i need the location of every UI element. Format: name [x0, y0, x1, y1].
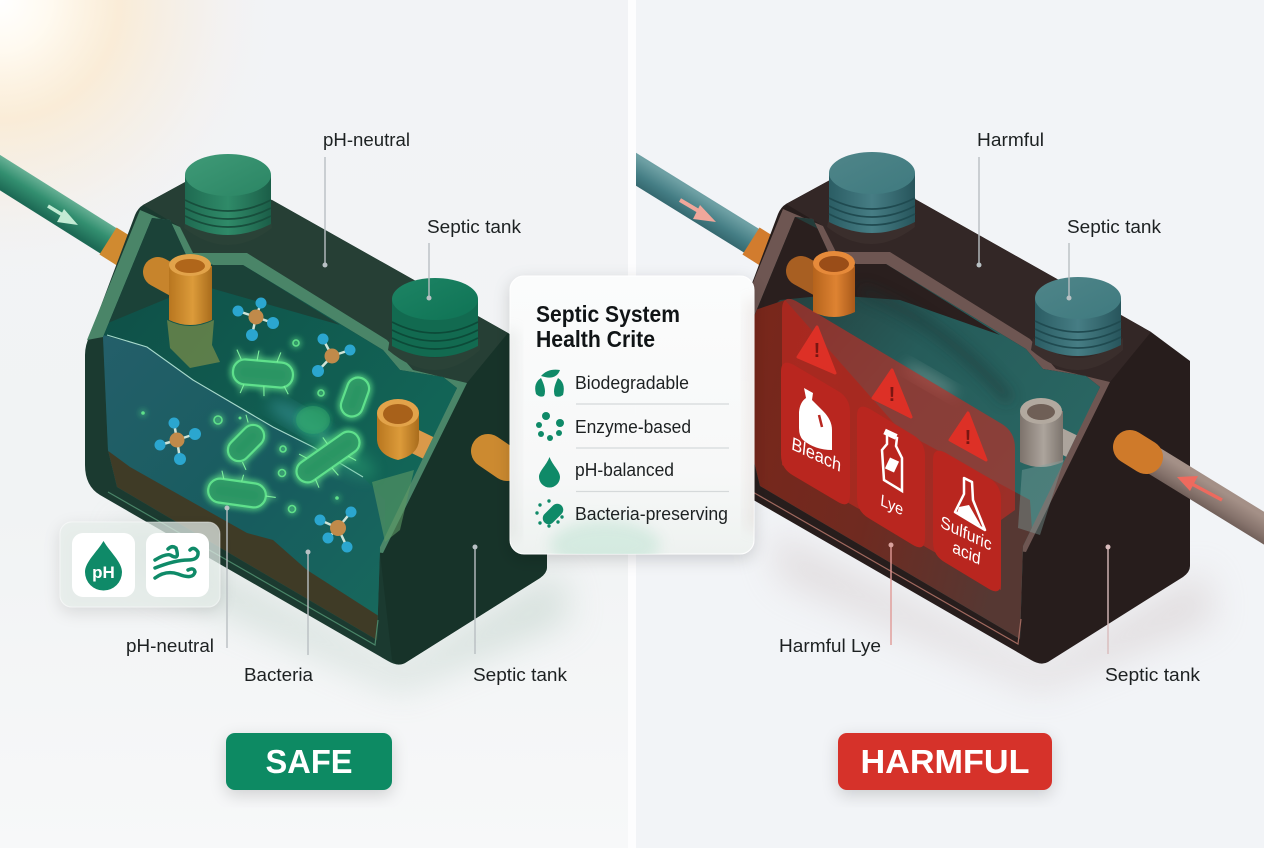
cap front collar: [388, 338, 480, 370]
outlet pipe right tank: [1130, 447, 1264, 538]
badge: SAFE: [226, 733, 392, 790]
top face: [143, 181, 508, 383]
card: Bleach: Bleach: [791, 433, 842, 476]
outlet elbow: [412, 440, 445, 456]
inlet pipe right tank: [636, 152, 770, 265]
inlet pipe left: [0, 160, 135, 258]
label: pH-neutral bottom: [126, 506, 230, 656]
rough foam: [874, 298, 1012, 402]
label: Septic tank body: [472, 544, 568, 685]
item: Biodegradable: Biodegradable: [575, 373, 689, 393]
panel heading: Health Crite: [536, 326, 655, 352]
outlet pipe riser: [1018, 398, 1064, 535]
badge: HARMFUL: HARMFUL: [860, 743, 1030, 780]
label: Harmful Lye: Harmful Lye: [779, 636, 881, 656]
label: Septic tank lid: Septic tank: [427, 217, 522, 237]
light patch: [266, 396, 332, 442]
cap front collar: [1031, 338, 1123, 370]
front water: [103, 335, 384, 616]
lid: back: [829, 152, 915, 233]
panel heading: Septic System: [536, 301, 680, 327]
cap rear collar: [184, 218, 272, 245]
card: Sulfuric acid: [933, 451, 1001, 591]
icon: bacterium: [535, 499, 566, 528]
label: Harmful: Harmful: [977, 130, 1044, 150]
dry interior: [103, 218, 340, 325]
card: pH drop: pH: [92, 563, 115, 582]
label: pH-neutral top: [322, 130, 410, 268]
translucent red sheet: [782, 299, 1015, 590]
septic tank: harmful: [728, 152, 1190, 664]
item: Enzyme-based: [536, 412, 691, 441]
icon: enzyme dots: [536, 412, 564, 441]
bleach bottle icon: [799, 388, 832, 450]
item: Bacteria-preserving: Bacteria-preserving: [575, 504, 728, 524]
item: Bacteria-preserving: [535, 499, 728, 528]
lid: back: [185, 154, 271, 235]
icon: drop: [539, 457, 560, 488]
small particles: [141, 340, 339, 512]
item: pH-balanced: pH-balanced: [575, 460, 674, 480]
submerged part: [1018, 460, 1064, 535]
warning triangle 1: [798, 327, 835, 373]
card: Lye: [857, 407, 925, 547]
labels and leaders: harmful: [779, 130, 1201, 685]
cutaway rim: [730, 209, 1110, 552]
sun glow: [0, 0, 300, 300]
card: air flow: [146, 533, 209, 597]
tank body: [728, 180, 1190, 664]
label: Septic tank body: Septic tank: [1105, 665, 1201, 685]
card: Sulfuric acid: acid: [952, 537, 982, 569]
icon tray: pH and air: [60, 522, 220, 607]
flow arrow: [48, 206, 66, 217]
flask icon: [955, 478, 985, 530]
label: Harmful Lye: [779, 542, 894, 656]
label: Bacteria: [244, 550, 314, 685]
badge: SAFE: SAFE: [266, 743, 352, 780]
septic tank: safe: [85, 154, 547, 665]
icon: recycling leaves: [535, 370, 564, 397]
top face: [786, 180, 1151, 382]
panel heading: [536, 301, 680, 352]
panel: septic system health criteria: [500, 276, 764, 570]
submerged part: [372, 470, 414, 542]
coupling: [108, 241, 135, 258]
sediment: [108, 451, 378, 640]
lid: front: [1035, 277, 1121, 356]
card: Bleach: [781, 363, 850, 504]
green slime: [303, 432, 376, 481]
card: pH drop: [72, 533, 135, 597]
bacteria: [207, 348, 372, 510]
warning triangle 3: !: [965, 427, 971, 449]
flow arrow: [680, 200, 702, 213]
cutaway rim: [87, 210, 467, 553]
label: Septic tank lid: Septic tank: [1067, 217, 1162, 237]
card: Lye: Lye: [880, 492, 904, 520]
cap rear collar: [827, 217, 915, 244]
lower frame line: [108, 492, 378, 645]
outlet elbow: [1063, 428, 1077, 457]
inlet pipe riser: [813, 251, 855, 317]
item: Enzyme-based: Enzyme-based: [575, 417, 691, 437]
lid: front: [392, 278, 478, 357]
coupling: [751, 241, 778, 258]
warning triangle 2: !: [889, 384, 895, 406]
floor shadow right: [770, 530, 1215, 690]
center divider: [628, 0, 636, 848]
warning triangle 1: !: [814, 340, 820, 362]
outlet coupling: [488, 451, 535, 481]
warning triangle 2: [873, 370, 911, 417]
coupling: [1130, 447, 1146, 457]
back water: [103, 218, 457, 640]
badge: HARMFUL: [838, 733, 1052, 790]
floor shadow left: [120, 520, 570, 690]
label: Bacteria: Bacteria: [244, 665, 314, 685]
inlet pipe riser: [167, 254, 220, 368]
inlet elbow: [158, 272, 178, 283]
card: Sulfuric acid: Sulfuric: [940, 512, 993, 555]
flow arrow: [1192, 484, 1222, 500]
item: pH-balanced: [539, 457, 674, 488]
surface highlight: [107, 335, 363, 477]
molecules: [154, 298, 356, 552]
outlet pipe riser: [372, 399, 419, 542]
lower frame line: [751, 491, 1021, 644]
warning triangle 3: [950, 413, 986, 460]
inlet elbow: [801, 271, 821, 282]
background: right harmful side: [632, 0, 1264, 848]
label: pH-neutral top: pH-neutral: [323, 130, 410, 150]
tank body: [85, 181, 547, 665]
submerged part: [167, 320, 220, 368]
lye bottle icon: [882, 433, 902, 491]
labels and leaders: safe: [126, 130, 568, 685]
red lower water: [754, 300, 1032, 639]
label: Septic tank lid: [426, 217, 522, 300]
dark upper band: [740, 217, 1000, 336]
label: pH-neutral bottom: pH-neutral: [126, 636, 214, 656]
label: Septic tank body: [1105, 544, 1201, 685]
label: Harmful: [976, 130, 1044, 268]
water contents: [100, 218, 445, 650]
background: left safe side: [0, 0, 632, 848]
label: Septic tank lid: [1066, 217, 1162, 300]
interior water: [746, 217, 1100, 639]
label: Septic tank body: Septic tank: [473, 665, 568, 685]
side face: [380, 333, 547, 664]
item: Biodegradable: [535, 370, 689, 397]
warning overlay: [781, 299, 1015, 591]
